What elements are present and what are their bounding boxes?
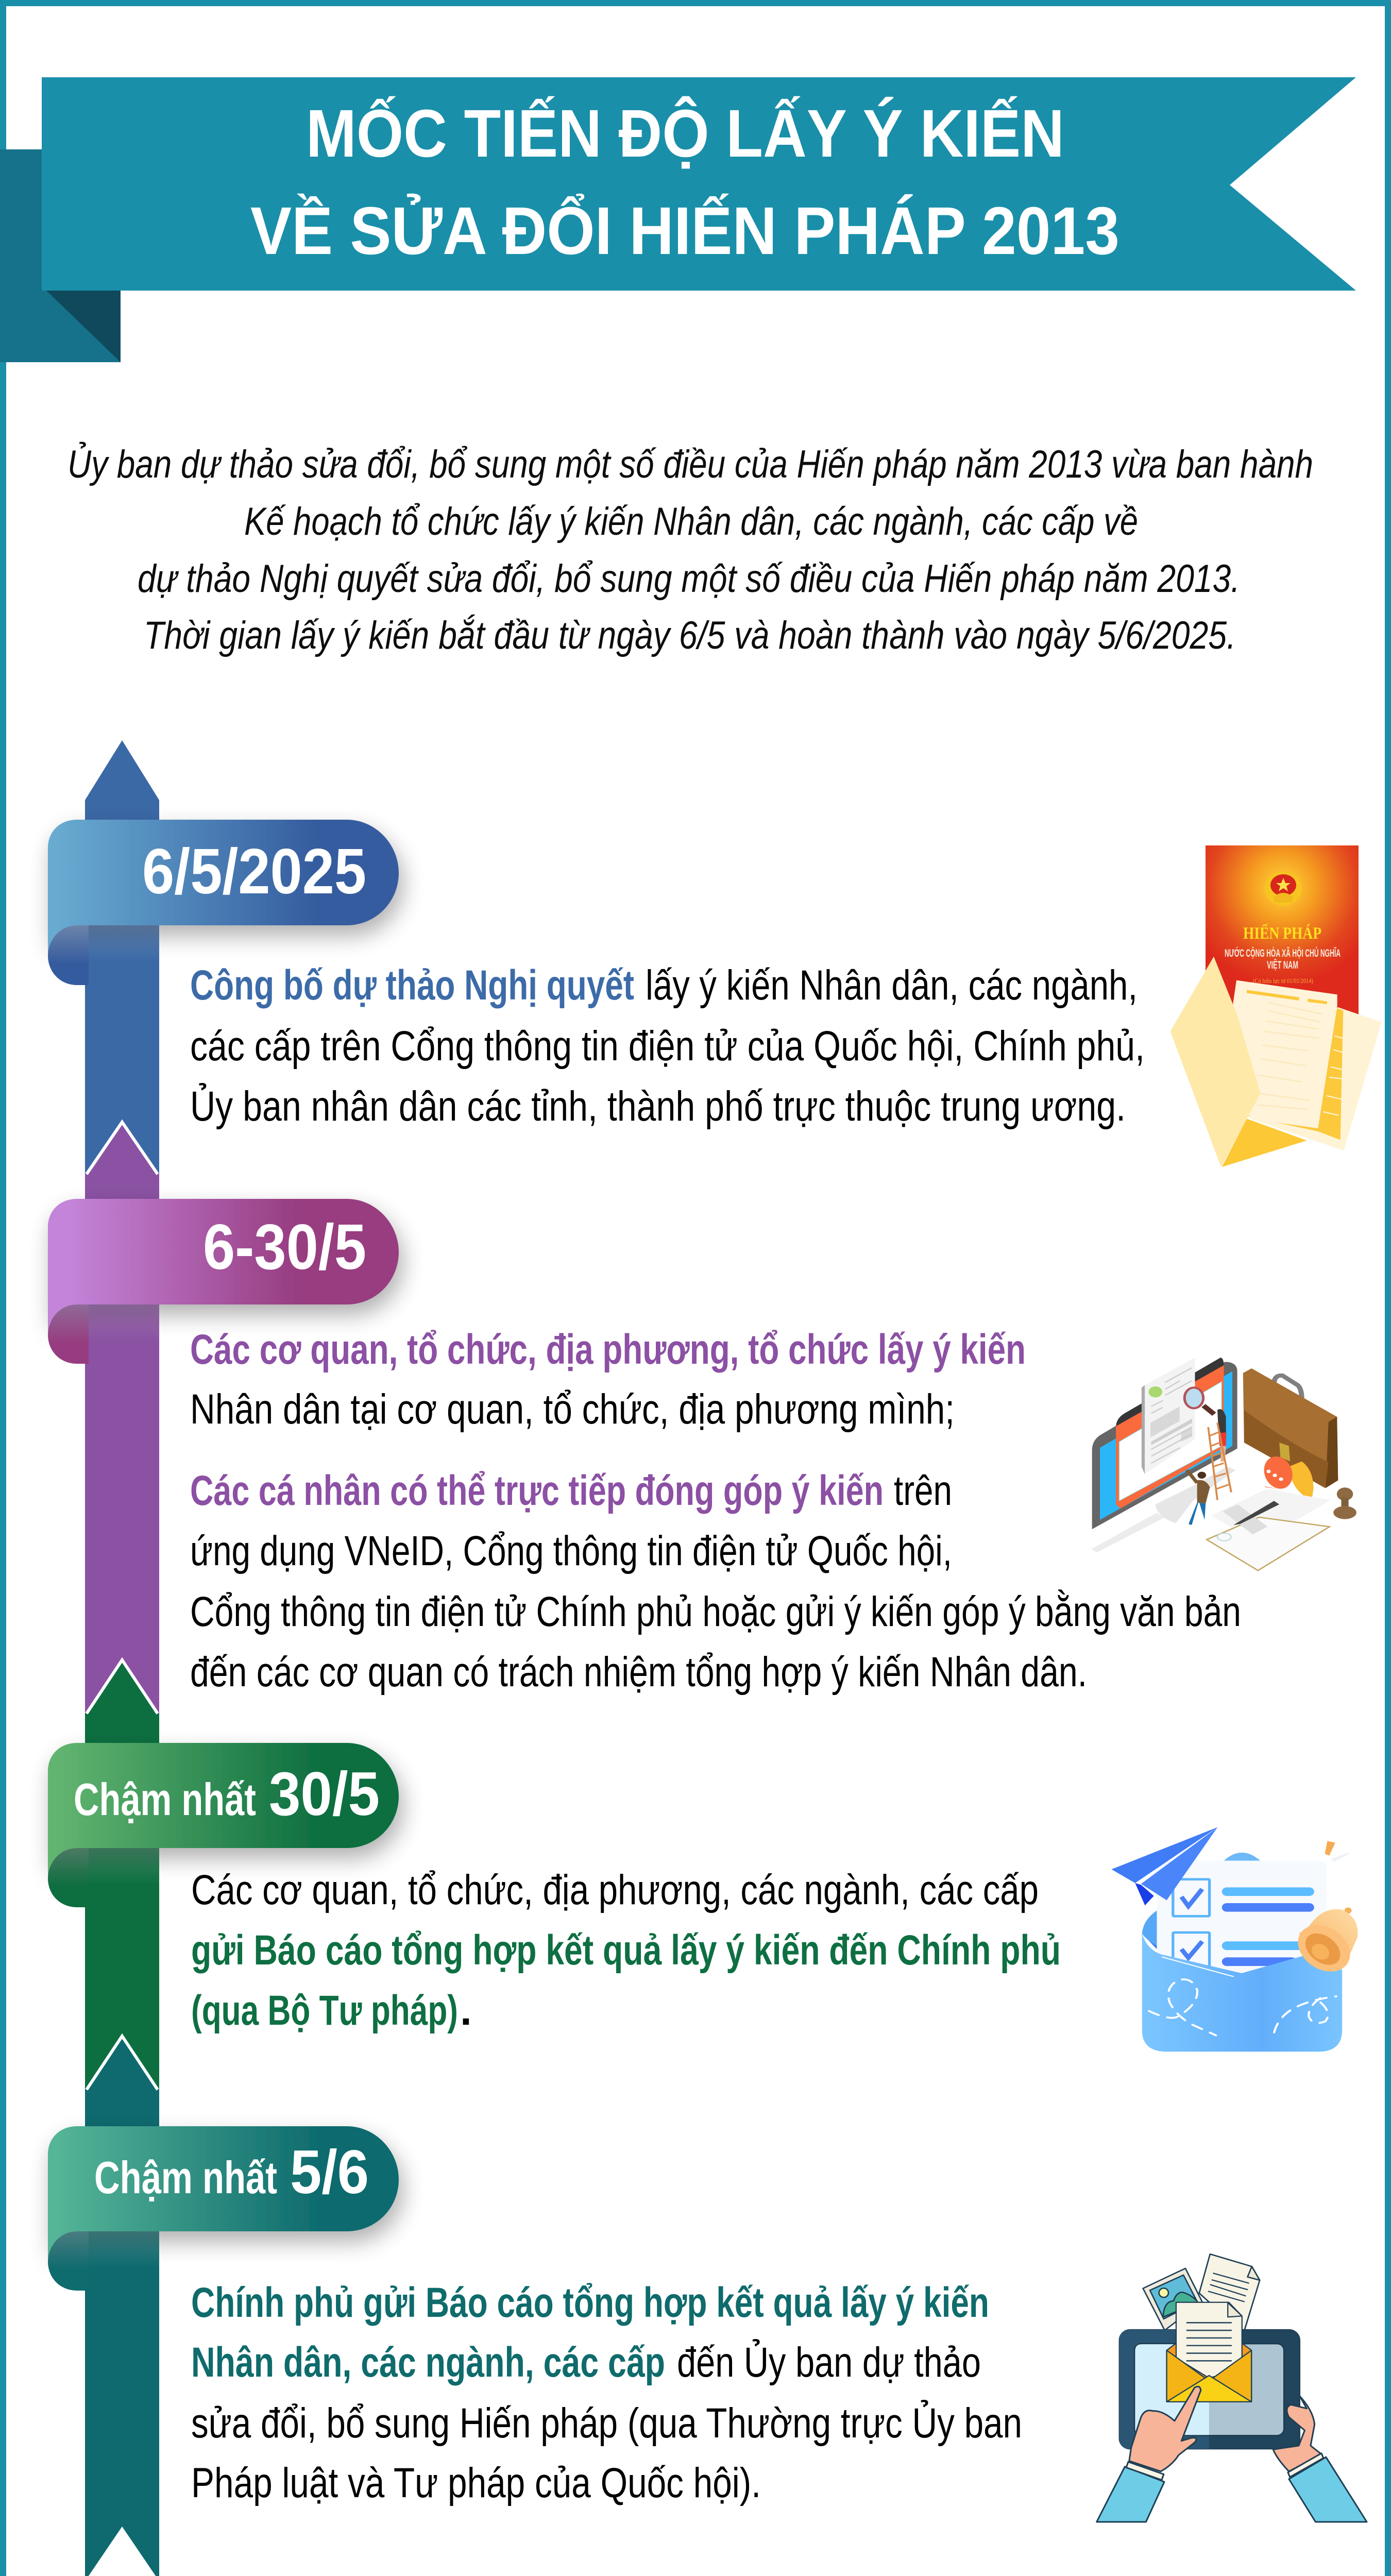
milestone 2: text: trên [894,1467,952,1514]
left hand [1097,2386,1201,2522]
milestone 3: text: (qua Bộ Tư pháp) [191,1987,458,2034]
envelope [1142,1910,1342,2052]
milestone 1: text: Ủy ban nhân dân các tỉnh, thành phố trực thuộc trung ương. [190,1083,1126,1130]
briefcase [1243,1368,1338,1488]
bell [1287,1907,1361,1980]
monitor [1091,1358,1237,1552]
arrow segment: blue [85,740,159,1180]
national emblem [1265,872,1302,906]
milestone 4: text: đến Ủy ban dự thảo [677,2339,981,2386]
document with check mark [1142,1358,1195,1475]
icon: constitution book and documents [1171,845,1382,1167]
milestone 1: text [190,962,1145,1130]
milestone 4: text: Pháp luật và Tư pháp của Quốc hội). [191,2460,761,2506]
milestone 4: ribbon Chậm nhất 5/6 [48,2126,399,2291]
milestone 2: text: ứng dụng VNeID, Cổng thông tin điện tử Quốc hội, [190,1528,952,1574]
milestone 3: ribbon Chậm nhất 30/5 [48,1743,399,1907]
milestone 3: text: gửi Báo cáo tổng hợp kết quả lấy ý kiến đến Chính phủ [191,1927,1061,1974]
envelope and letter [1167,2302,1251,2402]
banner ribbon [42,77,1356,291]
speech bubbles [1261,1454,1314,1502]
milestone 4: text: sửa đổi, bổ sung Hiến pháp (qua Thường trực Ủy ban [191,2400,1022,2447]
milestone 3: text [191,1867,1061,2034]
checklist paper [1142,1853,1327,1981]
intro text [67,442,1313,657]
papers, pen and stamp [1207,1487,1356,1570]
milestone 1: text: các cấp trên Cổng thông tin điện tử của Quốc hội, Chính phủ, [190,1023,1145,1070]
photo [1143,2268,1202,2330]
milestone 3: ribbon Chậm nhất 30/5: 30/5 [269,1759,380,1828]
milestone 1: text: Công bố dự thảo Nghị quyết [190,962,634,1009]
intro text: Kế hoạch tổ chức lấy ý kiến Nhân dân, các ngành, các cấp về [244,500,1138,544]
milestone 1: text: lấy ý kiến Nhân dân, các ngành, [646,962,1138,1009]
arrow segment: green [85,1660,159,2097]
milestone 3: text: Các cơ quan, tổ chức, địa phương, các ngành, các cấp [191,1867,1039,1913]
title banner [0,77,1356,362]
milestone 2: text [190,1326,1241,1696]
milestone 2: text: Các cơ quan, tổ chức, địa phương, tổ chức lấy ý kiến [190,1326,1026,1373]
man [1187,1470,1210,1525]
book subtitle [1225,947,1341,985]
book cover [1206,845,1359,1031]
paper plane [1111,1827,1217,1905]
milestone 4: ribbon Chậm nhất 5/6: Chậm nhất [94,2152,277,2203]
milestone 1: ribbon 6/5/2025 [48,820,399,985]
milestone 2: ribbon 6-30/5 [48,1199,399,1364]
icon: hands holding tablet with envelope [1097,2254,1367,2522]
timeline arrow [85,740,159,2576]
title text: MỐC TIẾN ĐỘ LẤY Ý KIẾN [306,95,1064,171]
milestone 3: ribbon Chậm nhất 30/5: Chậm nhất [74,1774,256,1825]
book title: HIẾN PHÁP [1243,923,1321,943]
milestone 4: text: Nhân dân, các ngành, các cấp [191,2339,665,2386]
banner fold [0,149,121,362]
sparkles [1325,1841,1349,1861]
back document [1199,2254,1260,2333]
magnifier and woman on ladder [1184,1387,1231,1500]
milestone 1: ribbon 6/5/2025: 6/5/2025 [142,836,366,907]
arrow segment: teal [85,2036,159,2576]
milestone 2: text: Các cá nhân có thể trực tiếp đóng góp ý kiến [190,1467,884,1514]
right hand [1273,2396,1367,2522]
icon: computer, briefcase and documents [1091,1358,1356,1570]
milestone 2: text: đến các cơ quan có trách nhiệm tổng hợp ý kiến Nhân dân. [190,1649,1087,1696]
icon: envelope with checklist, paper plane and bell [1111,1827,1361,2052]
milestone 2: ribbon 6-30/5: 6-30/5 [203,1212,366,1283]
milestone 4: ribbon Chậm nhất 5/6: 5/6 [290,2138,369,2207]
milestone 4: text [191,2279,1022,2506]
milestone 4: text: Chính phủ gửi Báo cáo tổng hợp kết quả lấy ý kiến [191,2279,989,2326]
folder and sheets [1171,957,1382,1167]
milestone 3: text: . [460,1987,472,2034]
milestone 2: text: Nhân dân tại cơ quan, tổ chức, địa phương mình; [190,1386,955,1433]
tablet [1119,2330,1300,2449]
title text: VỀ SỬA ĐỔI HIẾN PHÁP 2013 [250,193,1119,268]
arrow segment: purple [85,1122,159,1721]
title text [250,95,1119,268]
book subtitle: VIỆT NAM [1267,959,1298,971]
book subtitle: (Có hiệu lực từ 01/01/2014) [1253,977,1313,985]
